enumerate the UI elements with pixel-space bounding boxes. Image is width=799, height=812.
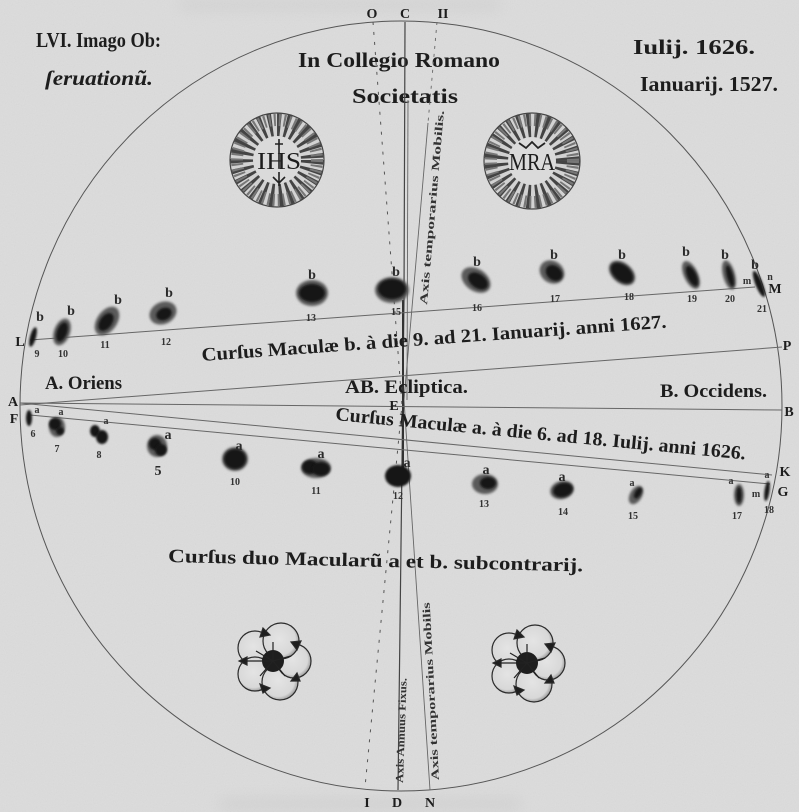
caption: course of spot b: Curſus Maculæ b. à die 9. ad 21. Ianuarij. anni 1627.	[201, 312, 667, 366]
rim letters: top	[367, 7, 448, 22]
rim letters: left	[8, 335, 25, 427]
rim letters: right: M	[768, 282, 782, 297]
spot a day 14	[548, 470, 576, 518]
heading: dates: Ianuarij. 1527.	[640, 72, 778, 96]
spot b day 11	[90, 293, 124, 351]
label: west: B. Occidens.	[660, 381, 767, 402]
spot a day 12: 12	[393, 491, 403, 502]
rim letters: right: K	[780, 465, 791, 480]
spot a day 5: 5	[154, 464, 162, 479]
spot b day 10	[50, 304, 75, 360]
rim letters: right	[768, 282, 794, 500]
rim letters: bottom: I	[364, 796, 370, 811]
emblem: MRA sunburst: MRA	[509, 150, 556, 176]
spot a day 6: 6	[30, 429, 36, 440]
spot b day 16	[457, 255, 495, 314]
spot b day 13	[296, 268, 328, 324]
rim letters: left: A	[8, 395, 19, 410]
spot b day 21: 21	[757, 304, 767, 315]
spot a day 11	[301, 447, 331, 497]
spot a day 12: a	[404, 456, 410, 471]
spot b day 11: 11	[100, 340, 110, 351]
spot a day 18: 18	[764, 505, 774, 516]
emblem: MRA sunburst	[484, 113, 580, 209]
spot b day 11: b	[114, 293, 122, 308]
emblem: IHS sunburst	[230, 113, 324, 207]
spot b day 16: 16	[472, 303, 482, 314]
caption: course of spot a: Curſus Maculæ a. à die 6. ad 18. Iulij. anni 1626.	[335, 404, 747, 464]
spot b day 21: n	[767, 272, 773, 283]
emblem: IHS sunburst: IHS	[257, 149, 301, 175]
spot b day 21	[743, 258, 773, 315]
spot b day 13: 13	[306, 313, 316, 324]
spot b day 21: b	[751, 258, 759, 273]
spot a day 11: 11	[311, 486, 321, 497]
rose right	[492, 625, 565, 702]
spot b day 10: b	[67, 304, 75, 319]
spot b day 9: 9	[34, 349, 40, 360]
axis lines	[365, 22, 437, 790]
spot a day 13	[472, 463, 498, 510]
spot a day 6	[26, 405, 40, 440]
axis label: temporarius lower: Axis temporarius Mobilis	[421, 601, 442, 780]
spot b day 17	[535, 248, 569, 305]
heading: college: In Collegio Romano	[298, 48, 500, 72]
spot a day 13: 13	[479, 499, 489, 510]
rim letters: bottom: D	[392, 796, 402, 811]
spot b day 9: b	[36, 310, 44, 325]
spot b day 15	[375, 265, 409, 318]
spot a day 5	[147, 428, 172, 479]
spot a day 14: a	[558, 470, 566, 485]
spot b day 19	[678, 245, 704, 305]
rim letters: left: L	[15, 335, 25, 350]
heading: plate title	[36, 28, 161, 90]
spots of track a	[26, 405, 774, 522]
caption: two opposite courses: Curſus duo Macularũ a et b. subcontrarij.	[168, 546, 583, 576]
spot a day 17: 17	[732, 511, 742, 522]
spot a day 8: 8	[96, 450, 102, 461]
spot b day 19: 19	[687, 294, 697, 305]
spot b day 20: 20	[725, 294, 735, 305]
rim letters: bottom: N	[425, 796, 435, 811]
label: ecliptic: AB. Ecliptica.	[345, 377, 468, 398]
label: E: E	[389, 399, 399, 414]
axis label: fixus lower: Axis Annuus Fixus.	[394, 677, 410, 783]
label: east: A. Oriens	[45, 373, 122, 394]
rim letters: right: B	[784, 405, 794, 420]
spot b day 18	[604, 248, 640, 303]
spot a day 7: a	[58, 407, 64, 418]
spot a day 14: 14	[558, 507, 568, 518]
spot b day 10: 10	[58, 349, 68, 360]
spot a day 18: m	[752, 489, 761, 500]
spot a day 7	[49, 407, 65, 455]
heading: college: Societatis	[352, 84, 458, 108]
rose left	[238, 623, 311, 700]
heading: plate title: ſeruationũ.	[45, 66, 153, 90]
spot a day 13: a	[482, 463, 490, 478]
spot b day 12	[146, 286, 180, 348]
spot a day 10: 10	[230, 477, 240, 488]
rim letters: top: C	[400, 7, 410, 22]
heading: dates	[633, 35, 778, 96]
spots of track b	[28, 245, 773, 360]
spot a day 5: a	[164, 428, 172, 443]
spot a day 15: a	[630, 478, 634, 489]
spot a day 18: a	[764, 470, 770, 481]
heading: plate title: LVI. Imago Ob:	[36, 28, 161, 52]
spot b day 16: b	[473, 255, 481, 270]
spot a day 8: a	[104, 416, 108, 427]
spot a day 15	[626, 478, 646, 522]
spot a day 10: a	[236, 439, 242, 454]
spot a day 12	[385, 456, 411, 502]
spot b day 17: 17	[550, 294, 560, 305]
spot a day 17: a	[728, 476, 734, 487]
course lines	[20, 287, 782, 484]
rim letters: top: O	[367, 7, 378, 22]
rim letters: bottom	[364, 796, 435, 811]
spot b day 20	[719, 248, 739, 305]
heading: college	[298, 48, 500, 108]
spot b day 13: b	[308, 268, 316, 283]
heading: dates: Iulij. 1626.	[633, 35, 755, 59]
spot b day 19: b	[682, 245, 690, 260]
spot b day 9	[28, 310, 44, 360]
rim letters: left: F	[10, 412, 18, 427]
spot a day 10	[222, 439, 248, 488]
rim letters: right: G	[778, 485, 789, 500]
spot b day 17: b	[550, 248, 558, 263]
axis label: temporarius upper: Axis temporarius Mobilis.	[418, 110, 447, 305]
spot a day 7: 7	[54, 444, 60, 455]
spot b day 15: 15	[391, 307, 401, 318]
spot b day 21: m	[743, 276, 752, 287]
spot a day 17	[728, 476, 744, 522]
spot b day 18: 18	[624, 292, 634, 303]
spot a day 8	[90, 416, 108, 461]
rim letters: top: II	[438, 7, 448, 22]
spot b day 12: b	[165, 286, 173, 301]
spot a day 11: a	[318, 447, 324, 462]
rim letters: right: P	[783, 339, 792, 354]
spot b day 12: 12	[161, 337, 171, 348]
spot b day 20: b	[721, 248, 729, 263]
spot a day 6: a	[34, 405, 40, 416]
spot a day 18	[752, 470, 774, 516]
spot b day 15: b	[392, 265, 400, 280]
spot b day 18: b	[618, 248, 626, 263]
spot a day 15: 15	[628, 511, 638, 522]
